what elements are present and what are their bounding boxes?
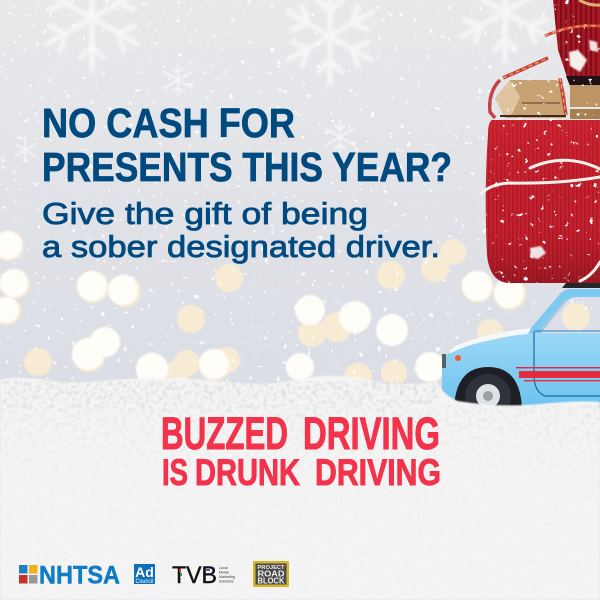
logo: TVB: Local	[219, 566, 228, 570]
logo: Ad Council	[134, 564, 155, 585]
logo: Project Roadblock: ROAD	[258, 570, 285, 578]
falling snow specks	[0, 0, 600, 395]
slogan: buzzed driving is drunk driving	[161, 408, 441, 493]
snow on gifts	[480, 0, 600, 283]
logo: TVB: Solutions	[219, 580, 234, 584]
logo: Project Roadblock: BLOCK	[258, 576, 285, 586]
logo: TVB: TVB	[172, 562, 217, 589]
headlight	[455, 355, 461, 361]
headline	[42, 100, 452, 190]
subheading: a sober designated driver.	[42, 229, 440, 264]
logo: TVB: Media	[219, 570, 229, 574]
car hood highlight	[449, 328, 531, 354]
slogan: buzzed driving is drunk driving: DRIVING	[315, 452, 441, 493]
red stripes	[516, 367, 600, 381]
subheading	[42, 196, 440, 264]
car door	[534, 332, 600, 396]
headline: PRESENTS THIS YEAR?	[42, 144, 452, 190]
logo: Project Roadblock: PROJECT	[258, 565, 285, 571]
roof rack	[562, 283, 600, 288]
large red gift box	[481, 120, 600, 283]
slogan: buzzed driving is drunk driving: DRIVING	[303, 408, 440, 459]
subheading: Give the gift of being	[42, 196, 368, 231]
logo: TVB: Marketing	[219, 575, 235, 579]
logo: NHTSA: NHTSA	[39, 562, 120, 590]
logo: Ad Council: Council	[136, 579, 154, 585]
toy car	[442, 283, 600, 420]
tan gift box	[490, 58, 600, 119]
snow ground	[0, 376, 600, 600]
slogan: buzzed driving is drunk driving: DRUNK	[195, 452, 300, 493]
bokeh lights	[0, 231, 590, 391]
car roof and windshield	[526, 289, 600, 334]
slogan: buzzed driving is drunk driving: BUZZED	[161, 408, 288, 459]
stacked gifts	[480, 0, 600, 283]
wheel	[454, 367, 522, 420]
snowflakes	[47, 0, 549, 84]
logo: Ad Council: Ad	[135, 564, 154, 580]
slogan: buzzed driving is drunk driving: IS	[162, 452, 188, 493]
top gift box	[545, 0, 600, 86]
headline: NO CASH FOR	[42, 100, 295, 146]
logo: Project Roadblock	[253, 561, 289, 587]
white ribbon	[481, 160, 600, 281]
car body	[442, 333, 600, 408]
